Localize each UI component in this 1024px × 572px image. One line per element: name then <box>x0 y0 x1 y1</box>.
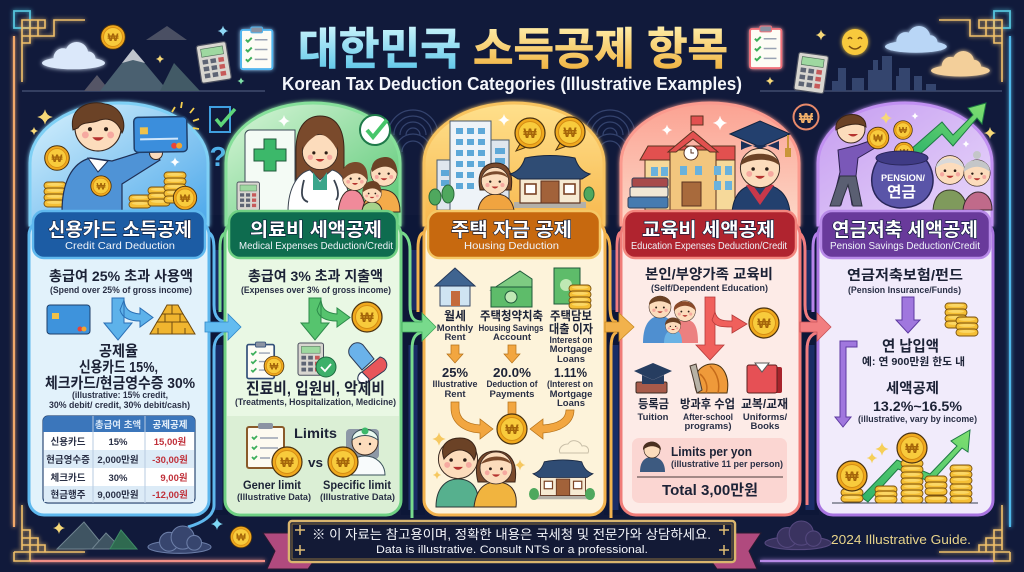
table: 15% <box>108 437 128 448</box>
icon: coin: ₩ <box>360 309 374 325</box>
character: doctor <box>288 116 350 212</box>
text: categories: programs) <box>685 421 731 432</box>
banner <box>624 211 796 258</box>
text: rate: (illustrative: 15% credit, <box>72 390 168 401</box>
card body <box>424 220 605 515</box>
icon: coins <box>867 127 889 149</box>
icon: card <box>47 305 90 334</box>
icon: coin <box>45 146 69 170</box>
icon: coin <box>230 526 252 548</box>
card body <box>621 220 800 515</box>
column: mortgage: Loans <box>557 354 585 365</box>
table: -30,00원 <box>152 454 188 466</box>
connector: orange <box>418 232 617 518</box>
icon: clipboard: ₩ <box>280 454 294 470</box>
footer decor left <box>53 518 252 553</box>
column: monthly rent: Illustrative <box>432 379 478 390</box>
column: monthly rent: Rent <box>444 389 466 400</box>
icon: coins: ₩ <box>873 134 883 145</box>
text: annual payment <box>862 338 965 368</box>
icon: won ring <box>794 104 818 130</box>
table: 9,000만원 <box>97 489 139 501</box>
column: monthly rent <box>432 268 478 400</box>
table: 15,00원 <box>154 436 186 448</box>
panel: medical <box>225 103 401 515</box>
coin stacks right <box>129 172 186 208</box>
character: woman <box>478 163 514 210</box>
column: savings: Account <box>493 332 532 343</box>
limits box: Limits per yon <box>671 444 752 459</box>
banner: Housing Deduction <box>464 240 559 252</box>
icon: buildings <box>437 121 509 211</box>
footer banner: Data is illustrative. Consult NTS or a professional. <box>376 544 648 556</box>
text: categories <box>638 396 788 432</box>
icon: coin in hand <box>91 176 111 196</box>
banner: Education Expenses Deduction/Credit <box>631 240 787 252</box>
card body <box>818 220 993 515</box>
panel: education <box>621 103 800 515</box>
column: mortgage: Loans <box>557 398 585 409</box>
icon: coin: ₩ <box>505 421 519 437</box>
icon: pension pot: PENSION/ <box>881 173 926 183</box>
icon: check circle <box>360 115 390 145</box>
text: credit rate <box>858 380 977 425</box>
arch: housing illustration <box>424 103 604 225</box>
limits section: Limits <box>294 425 337 441</box>
text: categories: Uniforms/ <box>743 412 788 423</box>
icon: pension pot <box>872 151 933 208</box>
column: mortgage: (Interest on <box>547 379 593 390</box>
text: categories: 교복/교재 <box>741 396 788 411</box>
icon: coin <box>328 447 358 477</box>
icon: person <box>640 442 665 472</box>
footer banner <box>263 521 761 569</box>
connector: pink <box>617 232 819 505</box>
icon: coin right: ₩ <box>180 193 191 205</box>
text: threshold: 총급여 3% 초과 지출액 <box>248 268 383 284</box>
text: credit rate: 세액공제 <box>886 380 939 396</box>
character: elder man <box>933 156 967 210</box>
table: 30% <box>108 473 128 484</box>
header decor right <box>750 26 1002 94</box>
icon: coin <box>894 121 912 139</box>
table: 공제공제 <box>153 419 187 431</box>
subtitle: Korean Tax Deduction Categories (Illustrative Examples) <box>282 73 742 94</box>
chart: coin stacks with growth arrow <box>832 430 978 503</box>
column: savings <box>478 271 544 400</box>
arrows: converge to coin <box>451 402 574 439</box>
icon: coin: ₩ <box>757 315 771 331</box>
text: rate: 신용카드 15%, <box>79 359 158 376</box>
limits section <box>227 416 399 513</box>
column: mortgage: 주택담보 <box>550 309 592 323</box>
icon: coin: ₩ <box>899 125 908 135</box>
icon: after-school ball <box>690 364 728 393</box>
limits box: (illustrative 11 per person) <box>671 459 783 470</box>
text: credit rate: (illustrative, vary by income) <box>858 414 977 425</box>
icon: clipboard <box>241 27 272 69</box>
banner <box>428 211 600 258</box>
connector: blue <box>188 232 228 527</box>
icon: coin: ₩ <box>236 533 246 544</box>
icon: school <box>640 116 735 210</box>
arrow: down <box>896 297 920 333</box>
arch: education illustration <box>621 103 799 225</box>
limits section: Specific limit <box>323 480 391 492</box>
table: 신용카드 <box>51 436 86 448</box>
banner: 신용카드 소득공제 <box>48 219 192 241</box>
banner <box>821 211 990 258</box>
icon: medical document <box>245 130 295 212</box>
icon: cloud gold <box>931 51 990 76</box>
icon: clipboard <box>247 423 302 477</box>
text: product: (Pension Insurance/Funds) <box>848 285 961 296</box>
icon: smiley sun <box>842 29 868 55</box>
column: mortgage: Mortgage <box>550 389 592 400</box>
icon: shine rays <box>172 102 199 129</box>
table: -12,00원 <box>152 489 188 501</box>
arch: pension illustration <box>818 103 996 225</box>
icon: hanok <box>510 156 590 208</box>
column: mortgage: 1.11% <box>554 365 587 380</box>
column: savings: 20.0% <box>493 365 531 380</box>
icon: check clipboard <box>210 107 235 132</box>
icon: graduation cap <box>634 363 672 393</box>
arrow: down <box>447 345 463 363</box>
icon: growth arrow <box>910 103 986 156</box>
table: 체크카드 <box>51 472 86 484</box>
text: scope: 본인/부양가족 교육비 <box>645 266 773 282</box>
icon: credit card <box>134 117 187 152</box>
icon: gold bars <box>150 305 195 334</box>
icon: coin bubble: ₩ <box>523 125 537 141</box>
icon: clipboard <box>247 342 284 379</box>
limits box <box>632 438 787 503</box>
text: scope <box>645 266 773 294</box>
text: rate <box>45 343 195 411</box>
arch: medical illustration <box>226 103 400 225</box>
text: annual payment: 연 납입액 <box>882 338 939 355</box>
icon: coin <box>749 308 779 338</box>
banner <box>33 211 205 258</box>
icon: nurse <box>346 428 385 475</box>
character: family <box>338 157 400 212</box>
character: smiling man <box>62 103 162 212</box>
banner: Pension Savings Deduction/Credit <box>830 240 980 252</box>
text: expense types: (Treatments, Hospitalization, Medicine) <box>235 397 396 408</box>
text: threshold <box>241 268 391 296</box>
icon: clipboard red <box>750 26 781 68</box>
text: expense types <box>235 380 396 408</box>
column: mortgage: Mortgage <box>550 344 592 355</box>
column: savings: Housing Savings <box>478 323 544 334</box>
icon: cloud <box>148 526 211 553</box>
coin stack left <box>44 182 66 207</box>
character: elder woman <box>963 151 992 210</box>
icon: coin <box>101 25 125 49</box>
header decor left <box>22 25 272 91</box>
banner: 의료비 세액공제 <box>250 219 382 241</box>
table: 현금행주 <box>51 489 86 501</box>
column: mortgage: Interest on <box>550 335 593 346</box>
icon: small trees <box>529 488 595 500</box>
icon: calculator check <box>298 343 336 377</box>
icon: coin bubble: ₩ <box>563 124 577 140</box>
icon: coin <box>497 414 527 444</box>
banner: 교육비 세액공제 <box>642 219 775 241</box>
banner: 연금저축 세액공제 <box>832 219 978 241</box>
arrow: fork <box>301 298 350 340</box>
icon: clipboard: ₩ <box>270 361 279 371</box>
title: 대한민국 <box>298 25 461 74</box>
arrowheads between panels <box>205 313 831 341</box>
icon: question mark: ? <box>209 141 227 172</box>
column: savings: 주택청약치축 <box>480 308 543 323</box>
column: monthly rent: 월세 <box>444 308 466 323</box>
panel: credit card <box>29 102 209 515</box>
text: categories: Books <box>750 421 780 432</box>
icon: won ring: ₩ <box>799 110 814 127</box>
panel: pension <box>818 103 996 515</box>
arrow: bent down <box>835 341 857 427</box>
table: 9,00원 <box>160 472 188 484</box>
column: savings: Payments <box>490 389 534 400</box>
table <box>43 416 195 503</box>
icon: coin: ₩ <box>108 32 119 44</box>
icon: cloud <box>42 42 105 69</box>
column: mortgage <box>547 268 593 409</box>
icon: coin in pot <box>894 142 914 162</box>
text: rate: 체크카드/현금영수증 30% <box>45 375 195 392</box>
icon: cloud outline <box>559 441 589 453</box>
icon: uniform <box>747 363 782 393</box>
text: rate: 공제율 <box>99 343 138 360</box>
icon: trees <box>429 185 454 205</box>
title: 소득공제 항목 <box>473 25 728 74</box>
title <box>298 25 728 74</box>
limits section: Gener limit <box>243 480 301 492</box>
icon: pills <box>349 343 387 383</box>
icon: calculator <box>794 52 829 94</box>
banner: Medical Expenses Deduction/Credit <box>239 240 393 252</box>
text: categories: After-school <box>683 412 733 423</box>
icon: family <box>643 296 698 343</box>
column: monthly rent: 25% <box>442 365 468 380</box>
text: rate: 30% debit/ credit, 30% debit/cash) <box>49 400 190 411</box>
icon: cloud blue <box>885 26 947 53</box>
arch: credit card illustration <box>30 102 208 225</box>
icon: coin: ₩ <box>336 454 350 470</box>
text: credit rate: 13.2%~16.5% <box>873 398 963 414</box>
text: threshold: (Spend over 25% of gross income) <box>50 285 192 296</box>
icon: coin: ₩ <box>52 153 63 165</box>
character: man with coin <box>830 115 880 206</box>
panel: housing <box>424 103 605 515</box>
text: threshold <box>49 268 193 296</box>
column: monthly rent: Monthly <box>437 323 474 334</box>
icon: hanok small <box>533 460 593 499</box>
limits box: Total 3,00만원 <box>662 482 758 499</box>
footer decor right <box>765 521 831 550</box>
character: man <box>436 438 478 507</box>
card body <box>29 220 209 515</box>
icon: coin in pot: ₩ <box>900 147 909 157</box>
column: savings: Deduction of <box>486 379 538 390</box>
icon: coin bubble <box>555 117 585 150</box>
arrow: fork <box>104 298 153 340</box>
icon: coin stacks <box>945 303 978 336</box>
banner <box>229 211 397 258</box>
chart: coin stacks with growth arrow: ₩ <box>845 468 859 484</box>
text: categories: Tuition <box>638 412 669 423</box>
icon: books <box>628 178 668 208</box>
icon: cash <box>491 271 532 307</box>
limits section: (Illustrative Data) <box>237 492 311 503</box>
limits section: vs <box>308 455 323 470</box>
limits section: (Illustrative Data) <box>320 492 395 503</box>
card body <box>225 220 401 515</box>
icon: coin in hand: ₩ <box>97 181 106 192</box>
icon: coin right <box>173 186 197 210</box>
icon: tree <box>584 187 594 201</box>
icon: calculator <box>237 182 260 210</box>
character: woman <box>474 451 516 507</box>
text: product: 연금저축보험/펀드 <box>847 267 963 283</box>
text: expense types: 진료비, 입원비, 악제비 <box>246 380 385 398</box>
text: categories: 등록금 <box>638 397 669 411</box>
icon: pension pot: 연금 <box>887 184 916 201</box>
city skyline <box>832 56 936 91</box>
connector tracks <box>208 215 819 515</box>
arrow: down <box>504 345 520 363</box>
text: threshold: 총급여 25% 초과 사용액 <box>49 268 193 284</box>
table: 2,000만원 <box>97 454 139 466</box>
text: scope: (Self/Dependent Education) <box>651 283 768 294</box>
table: 현금영수증 <box>46 454 90 466</box>
icon: coin <box>352 302 382 332</box>
character: graduate <box>730 121 791 212</box>
text: categories: 방과후 수업 <box>680 396 735 411</box>
connector: green <box>220 232 422 518</box>
decor: wave patterns and small icons <box>388 110 635 152</box>
connector: purple <box>813 232 822 312</box>
icon: cash and coins <box>554 268 591 309</box>
chart: coin stacks with growth arrow: ₩ <box>905 440 919 456</box>
column: mortgage: 대출 이자 <box>549 322 593 336</box>
banner: Credit Card Deduction <box>65 240 175 252</box>
text: threshold: (Expenses over 3% of gross income) <box>241 285 391 296</box>
table: 총급여 초액 <box>95 419 141 431</box>
arrow: fork <box>696 297 747 360</box>
icon: house <box>435 268 475 306</box>
text: product <box>847 267 963 296</box>
footer banner: ※ 이 자료는 참고용이며, 정확한 내용은 국세청 및 전문가와 상담하세요. <box>312 527 711 542</box>
text: annual payment: 예: 연 900만원 한도 내 <box>862 355 965 368</box>
footer text: guide: 2024 Illustrative Guide. <box>831 533 971 547</box>
column: monthly rent: Rent <box>444 332 466 343</box>
icon: calculator <box>196 41 232 84</box>
banner: 주택 자금 공제 <box>451 219 572 241</box>
icon: coin bubble <box>515 118 545 151</box>
